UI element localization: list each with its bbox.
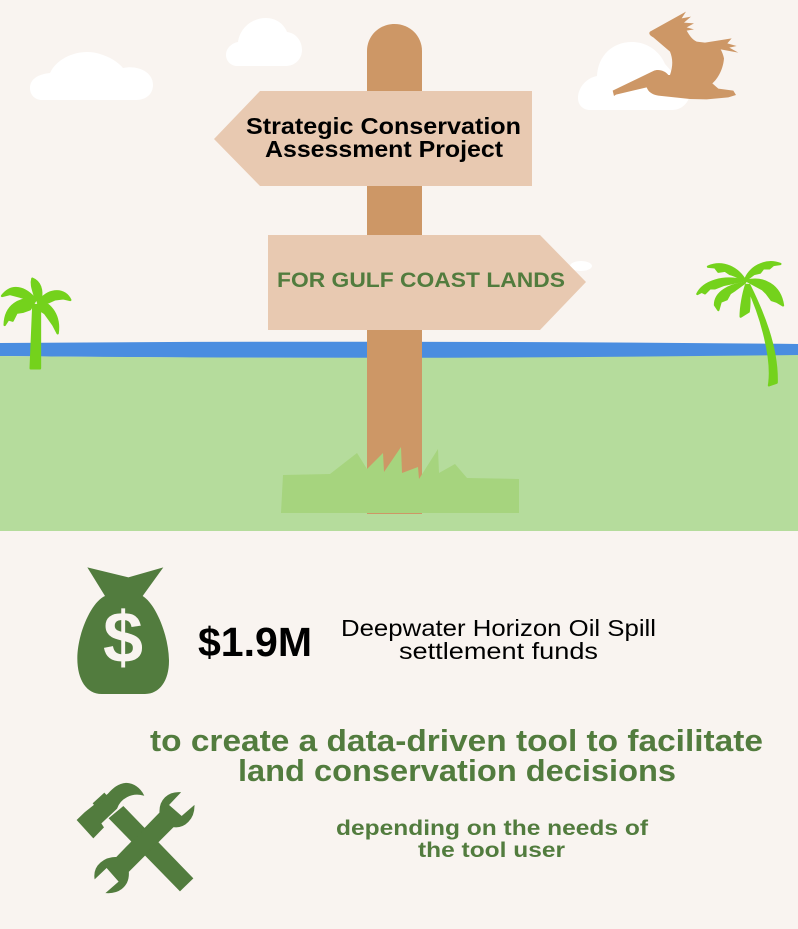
amount: $1.9M bbox=[198, 619, 312, 665]
sign title bbox=[246, 113, 521, 162]
icon: pelican bbox=[613, 12, 738, 99]
purpose statement bbox=[150, 723, 763, 788]
grass tuft bbox=[281, 447, 519, 513]
funding description: Deepwater Horizon Oil Spill bbox=[341, 615, 656, 641]
sign: right arrow bbox=[268, 235, 586, 330]
icon: money bag bbox=[77, 567, 169, 694]
water bbox=[0, 342, 798, 358]
icon: palm tree right bbox=[697, 262, 783, 385]
icon: hammer and wrench bbox=[77, 783, 194, 893]
sign title: Assessment Project bbox=[265, 136, 503, 162]
sign subtitle: FOR GULF COAST LANDS bbox=[277, 269, 565, 292]
cloud: right behind pelican bbox=[578, 42, 690, 110]
signpost bbox=[367, 24, 422, 514]
funding description: settlement funds bbox=[399, 638, 598, 664]
dollar sign: $ bbox=[103, 598, 143, 678]
sign title: Strategic Conservation bbox=[246, 113, 521, 139]
cloud: small behind sign bbox=[570, 261, 592, 271]
audience note bbox=[336, 817, 649, 862]
audience note: depending on the needs of bbox=[336, 817, 649, 840]
audience note: the tool user bbox=[418, 839, 565, 862]
purpose statement: to create a data-driven tool to facilitate bbox=[150, 723, 763, 758]
cloud: middle bbox=[226, 18, 302, 66]
purpose statement: land conservation decisions bbox=[238, 753, 676, 788]
icon: palm tree left bbox=[2, 279, 70, 368]
sign: left arrow bbox=[214, 91, 532, 186]
ground bbox=[0, 355, 798, 531]
cloud: left bbox=[30, 52, 153, 100]
funding description bbox=[341, 615, 656, 664]
